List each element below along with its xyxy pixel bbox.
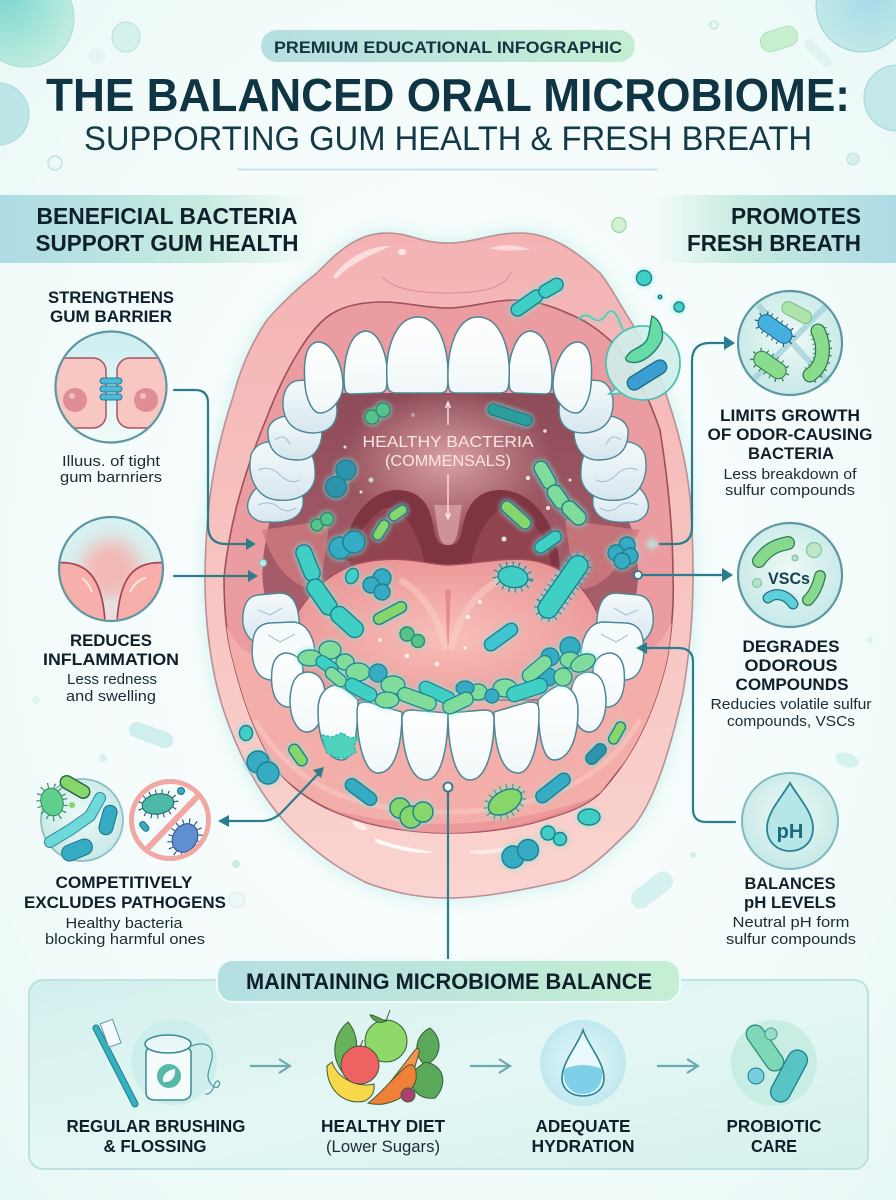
label: diet: (Lower Sugars): [326, 1137, 440, 1156]
speech bubble with bacteria: [606, 316, 680, 400]
label: brushing: [66, 1116, 246, 1156]
label: probiotic: CARE: [751, 1136, 797, 1156]
text: balances pH: Neutral pH form: [732, 914, 850, 931]
banner: right: PROMOTES: [731, 203, 861, 229]
text: strengthens gum barrier: gum barnriers: [60, 469, 162, 486]
label: hydration: ADEQUATE: [536, 1116, 630, 1136]
arrow: [657, 1059, 698, 1073]
icon: toothbrush and floss: [96, 1019, 220, 1105]
circle icon: VSCs: VSCs: [768, 569, 810, 588]
lip highlights: [333, 245, 530, 854]
circle icon: inflammation: [55, 517, 167, 621]
icon: probiotic capsules: [731, 1020, 817, 1106]
circle icon: pH drop: pH: [777, 821, 803, 843]
inner mouth: [224, 300, 673, 833]
text: reduces inflammation: and swelling: [66, 688, 156, 705]
label: hydration: [532, 1116, 634, 1156]
icon: healthy diet: [327, 1010, 443, 1104]
text: degrades odorous compounds: COMPOUNDS: [736, 676, 848, 694]
circle icon: limits growth: [738, 291, 842, 395]
uvula: [434, 505, 462, 545]
palate label: [362, 402, 534, 519]
text: reduces inflammation: Less redness: [67, 671, 157, 688]
text: balances pH: [726, 875, 856, 948]
arrow: inflammation to mouth: [174, 570, 258, 582]
arrow: pathogens to plaque: [218, 767, 324, 827]
circle icon: VSCs: [738, 523, 842, 627]
mouth interior: [224, 390, 673, 833]
upper teeth: [248, 317, 448, 522]
text: limits growth: BACTERIA: [748, 445, 834, 463]
banner: right: [655, 195, 896, 263]
icon: healthy bacteria circle: [36, 773, 123, 863]
text: competitively excludes pathogens: EXCLUDES PATHOGENS: [24, 894, 226, 912]
text: balances pH: BALANCES: [744, 875, 836, 893]
connector: mouth to maintenance panel: [444, 782, 452, 962]
banner: right: FRESH BREATH: [687, 230, 861, 256]
lower lip and gum bacteria: [240, 726, 252, 740]
arrow: mouth to limits growth: [647, 336, 735, 549]
title: [46, 69, 850, 158]
decorative bubbles: [0, 0, 896, 913]
lips: [205, 233, 693, 898]
text: degrades odorous compounds: ODOROUS: [744, 657, 838, 675]
text: limits growth: OF ODOR-CAUSING: [708, 426, 872, 444]
arrow: gum barrier to mouth: [174, 390, 256, 550]
label: diet: HEALTHY DIET: [321, 1116, 445, 1136]
biofilm on lower teeth: [298, 637, 598, 716]
spiky bacteria on tongue: [494, 562, 532, 592]
text: limits growth: sulfur compounds: [725, 482, 855, 499]
text: strengthens gum barrier: GUM BARRIER: [50, 308, 172, 326]
mouth glow: [205, 233, 693, 898]
header pill: PREMIUM EDUCATIONAL INFOGRAPHIC: [274, 39, 622, 57]
label: brushing: & FLOSSING: [104, 1136, 206, 1156]
text: limits growth: [708, 407, 872, 499]
text: limits growth: Less breakdown of: [724, 466, 857, 483]
plaque: [322, 733, 358, 758]
commensal bacteria: [240, 270, 684, 868]
icon: blocked pathogens: [132, 782, 208, 859]
text: competitively excludes pathogens: [24, 874, 226, 948]
text: degrades odorous compounds: Reducies volatile sulfur: [710, 696, 872, 713]
mouth illustration: [205, 233, 693, 898]
text: strengthens gum barrier: [48, 289, 174, 486]
text: competitively excludes pathogens: Healthy bacteria: [66, 915, 183, 932]
label: probiotic: [726, 1116, 822, 1156]
arrow: mouth to VSCs: [634, 568, 733, 582]
text: strengthens gum barrier: STRENGTHENS: [48, 289, 174, 307]
text: limits growth: LIMITS GROWTH: [720, 407, 860, 425]
lower gum: [224, 620, 673, 833]
arrow: [250, 1059, 290, 1073]
text: reduces inflammation: REDUCES: [70, 632, 152, 650]
text: degrades odorous compounds: compounds, VSCs: [727, 713, 855, 730]
banner: left: BENEFICIAL BACTERIA: [36, 203, 298, 229]
text: reduces inflammation: [43, 632, 179, 705]
panel heading: MAINTAINING MICROBIOME BALANCE: [246, 969, 652, 994]
arrow: pH to teeth: [636, 642, 735, 822]
palate: [262, 393, 638, 610]
label: diet: [321, 1116, 445, 1156]
label: hydration: HYDRATION: [532, 1136, 634, 1156]
panel heading: [217, 960, 680, 1002]
circle icon: pH drop: [742, 773, 838, 869]
title: SUPPORTING GUM HEALTH & FRESH BREATH: [84, 120, 812, 158]
label: brushing: REGULAR BRUSHING: [66, 1116, 246, 1136]
text: reduces inflammation: INFLAMMATION: [43, 651, 179, 669]
throat: [343, 490, 560, 575]
icon: hydration drop: [540, 1020, 626, 1106]
tongue: [293, 559, 605, 700]
text: degrades odorous compounds: [710, 638, 872, 730]
arrow: [470, 1059, 510, 1073]
text: balances pH: sulfur compounds: [726, 931, 856, 948]
palate bacteria: [365, 410, 379, 424]
banner: left: [0, 195, 310, 263]
mouth sparkles: [344, 413, 572, 666]
text: strengthens gum barrier: Illuus. of tight: [62, 453, 161, 470]
title: THE BALANCED ORAL MICROBIOME:: [46, 69, 850, 121]
text: competitively excludes pathogens: COMPETITIVELY: [56, 874, 192, 892]
big chain left: [293, 542, 367, 641]
palate label: (COMMENSALS): [385, 453, 511, 470]
panel: maintaining balance: [29, 960, 868, 1169]
banner: left: SUPPORT GUM HEALTH: [36, 230, 298, 256]
header pill: [261, 30, 635, 62]
palate label: HEALTHY BACTERIA: [362, 434, 534, 451]
circle icon: gum barrier: [54, 330, 168, 444]
label: probiotic: PROBIOTIC: [726, 1116, 822, 1136]
lower teeth: [243, 593, 448, 780]
upper lip chain: [509, 276, 566, 319]
text: degrades odorous compounds: DEGRADES: [742, 638, 840, 656]
text: balances pH: pH LEVELS: [744, 894, 836, 912]
text: competitively excludes pathogens: blocking harmful ones: [45, 931, 205, 948]
